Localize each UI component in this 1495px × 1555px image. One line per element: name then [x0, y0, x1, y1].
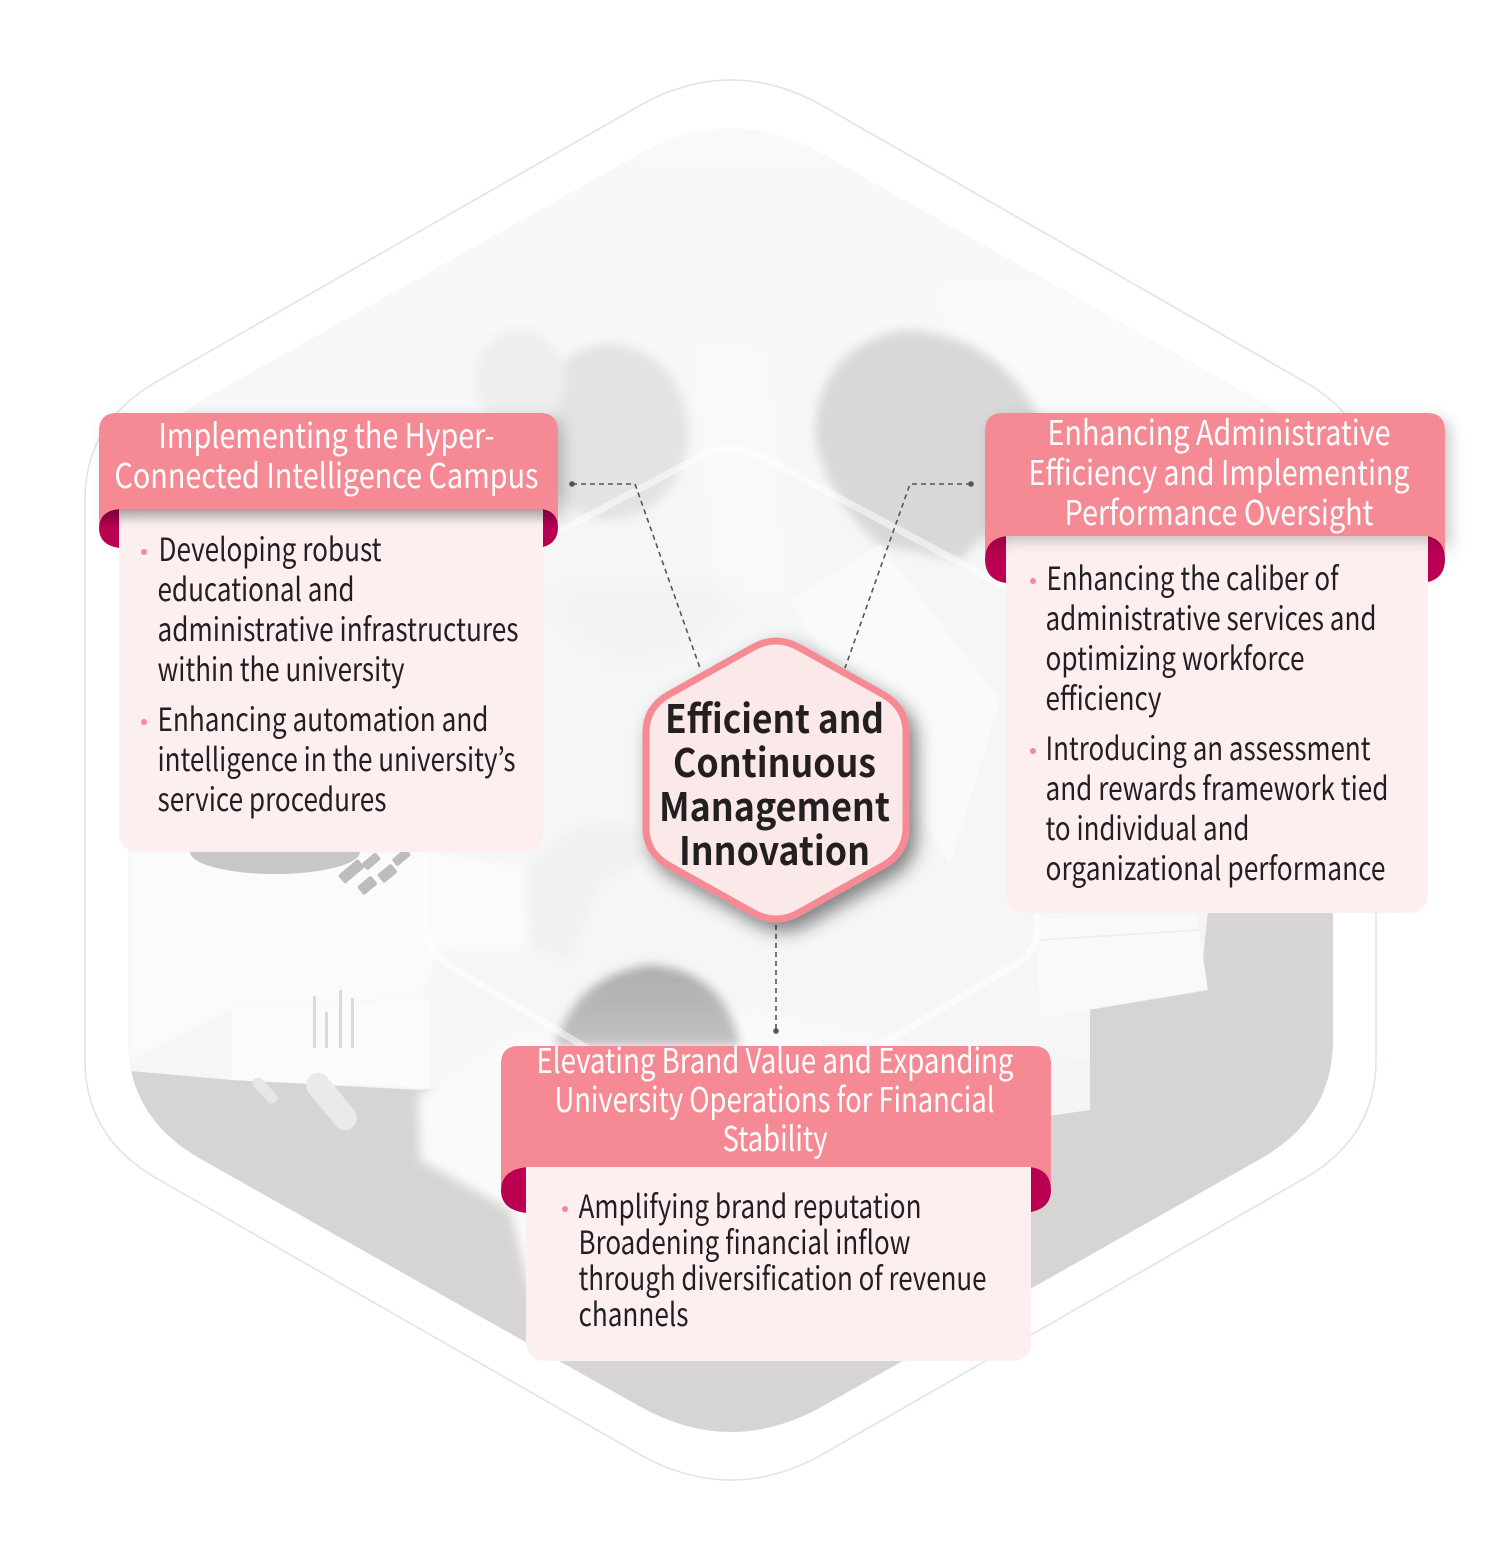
ribbon curls [985, 536, 1445, 583]
panel header: Performance Oversight [1064, 486, 1374, 535]
bullet list: educational and [158, 565, 354, 611]
central title: Continuous [673, 733, 876, 789]
panel header: Stability [722, 1112, 828, 1161]
central title: Innovation [679, 821, 870, 877]
bullet list: channels [578, 1290, 688, 1336]
photo: shoulders and heads [690, 340, 790, 600]
ribbon curls [501, 1167, 1051, 1213]
bullet list: intelligence in the university’s [158, 735, 516, 781]
panel header: Implementing the Hyper- [158, 409, 494, 458]
photo: chart bars on paper [313, 990, 354, 1048]
bullet list: administrative infrastructures [158, 605, 518, 651]
header shadow on body [119, 509, 543, 525]
connector: left panel to centre [569, 481, 700, 668]
panel body [526, 1140, 1031, 1361]
bullet list: Introducing an assessment [1046, 724, 1370, 770]
bullet list [1030, 554, 1388, 890]
outer hexagon outline [85, 80, 1376, 1480]
panel header [501, 1034, 1051, 1190]
connector: right panel to centre [845, 481, 974, 668]
panel body [1006, 510, 1428, 913]
bullet list: service procedures [158, 775, 386, 821]
bullet list: to individual and [1046, 804, 1250, 850]
inner translucent hexagon ring [554, 462, 962, 1046]
bullet list: Broadening financial inflow [578, 1218, 910, 1264]
bullet list: Developing robust [158, 525, 382, 571]
bullet list: Amplifying brand reputation [578, 1182, 922, 1228]
bullet list [141, 525, 518, 821]
photo: carpet [130, 913, 1333, 1432]
central title: Management [659, 777, 890, 833]
central title: Efficient and [665, 689, 884, 745]
photo: hands and papers [530, 872, 555, 948]
background photo hexagon [128, 256, 1333, 1432]
panel header: Enhancing Administrative [1048, 406, 1390, 455]
bullet list: administrative services and [1046, 594, 1376, 640]
panel header: Elevating Brand Value and Expanding [536, 1034, 1014, 1083]
panel body [119, 490, 543, 852]
bullet list: Enhancing the caliber of [1046, 554, 1340, 600]
panel: administrative efficiency [985, 406, 1445, 913]
panel: brand value and revenue [501, 1034, 1051, 1361]
photo: laptop keys [338, 852, 410, 895]
bullet list: through diversification of revenue [578, 1254, 986, 1300]
central hexagon: core goal [646, 641, 906, 919]
panel header: Efficiency and Implementing [1028, 446, 1410, 495]
connector: centre to bottom panel [773, 925, 779, 1034]
bullet list: Enhancing automation and [158, 695, 488, 741]
photo: people [128, 850, 560, 1060]
bullet list: optimizing workforce [1046, 634, 1304, 680]
panel header: University Operations for Financial [554, 1073, 994, 1122]
central title [659, 689, 890, 877]
panel header [985, 406, 1445, 559]
bullet list: organizational performance [1046, 844, 1386, 890]
bullet list: within the university [158, 645, 405, 691]
ribbon curls [99, 509, 558, 548]
panel header: Connected Intelligence Campus [114, 449, 538, 498]
bullet list: efficiency [1046, 674, 1162, 720]
panel header [99, 409, 558, 528]
bullet list: and rewards framework tied [1046, 764, 1388, 810]
bullet list [562, 1182, 986, 1336]
panel: hyper-connected intelligence campus [99, 409, 558, 852]
photo: table and papers [131, 1068, 444, 1090]
